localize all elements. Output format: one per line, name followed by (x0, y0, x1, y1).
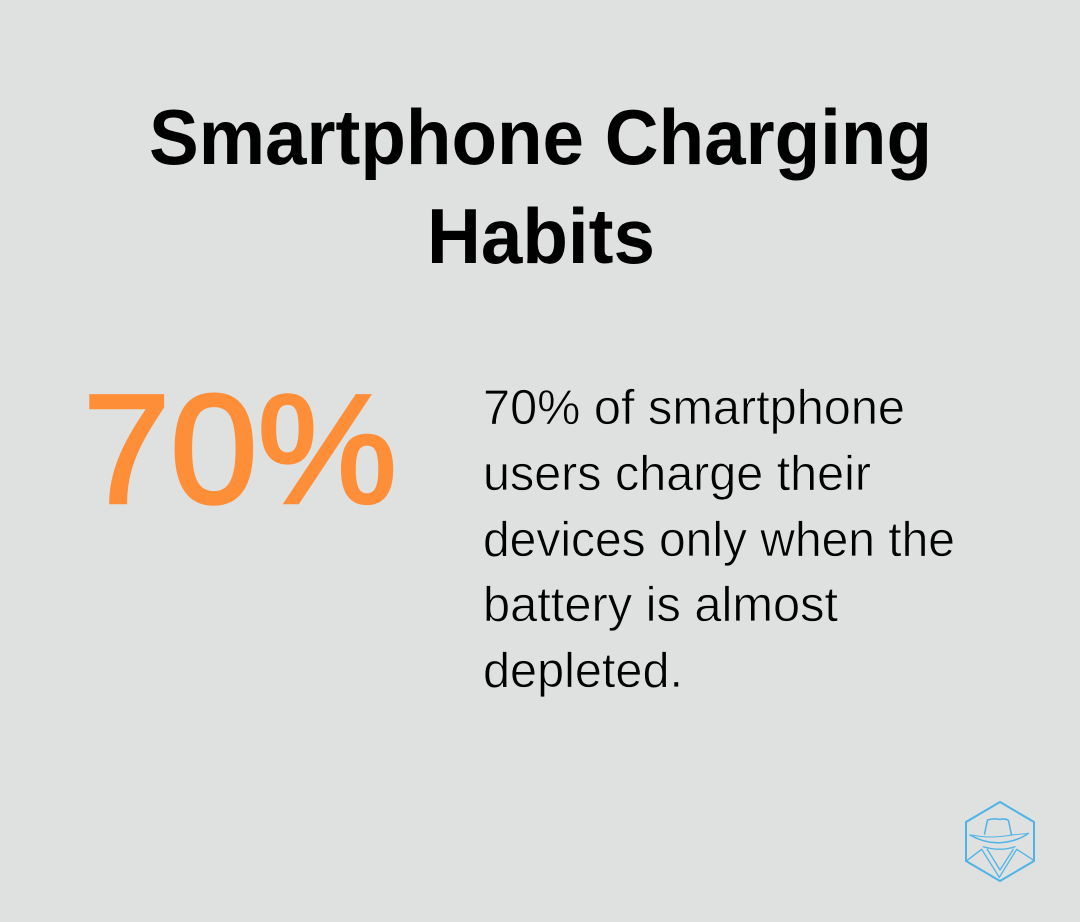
description text: users charge their (483, 447, 871, 501)
description text: depleted. (483, 644, 683, 698)
title: Smartphone Charging (149, 93, 932, 181)
title (149, 93, 932, 280)
description text: devices only when the (483, 513, 955, 567)
description text: 70% of smartphone (483, 381, 905, 435)
title: Habits (427, 192, 655, 280)
big statistic: 70%: 70% (83, 362, 397, 536)
description text: battery is almost (483, 578, 838, 632)
description text (483, 381, 955, 698)
icon: spy logo in hexagon (966, 802, 1034, 881)
